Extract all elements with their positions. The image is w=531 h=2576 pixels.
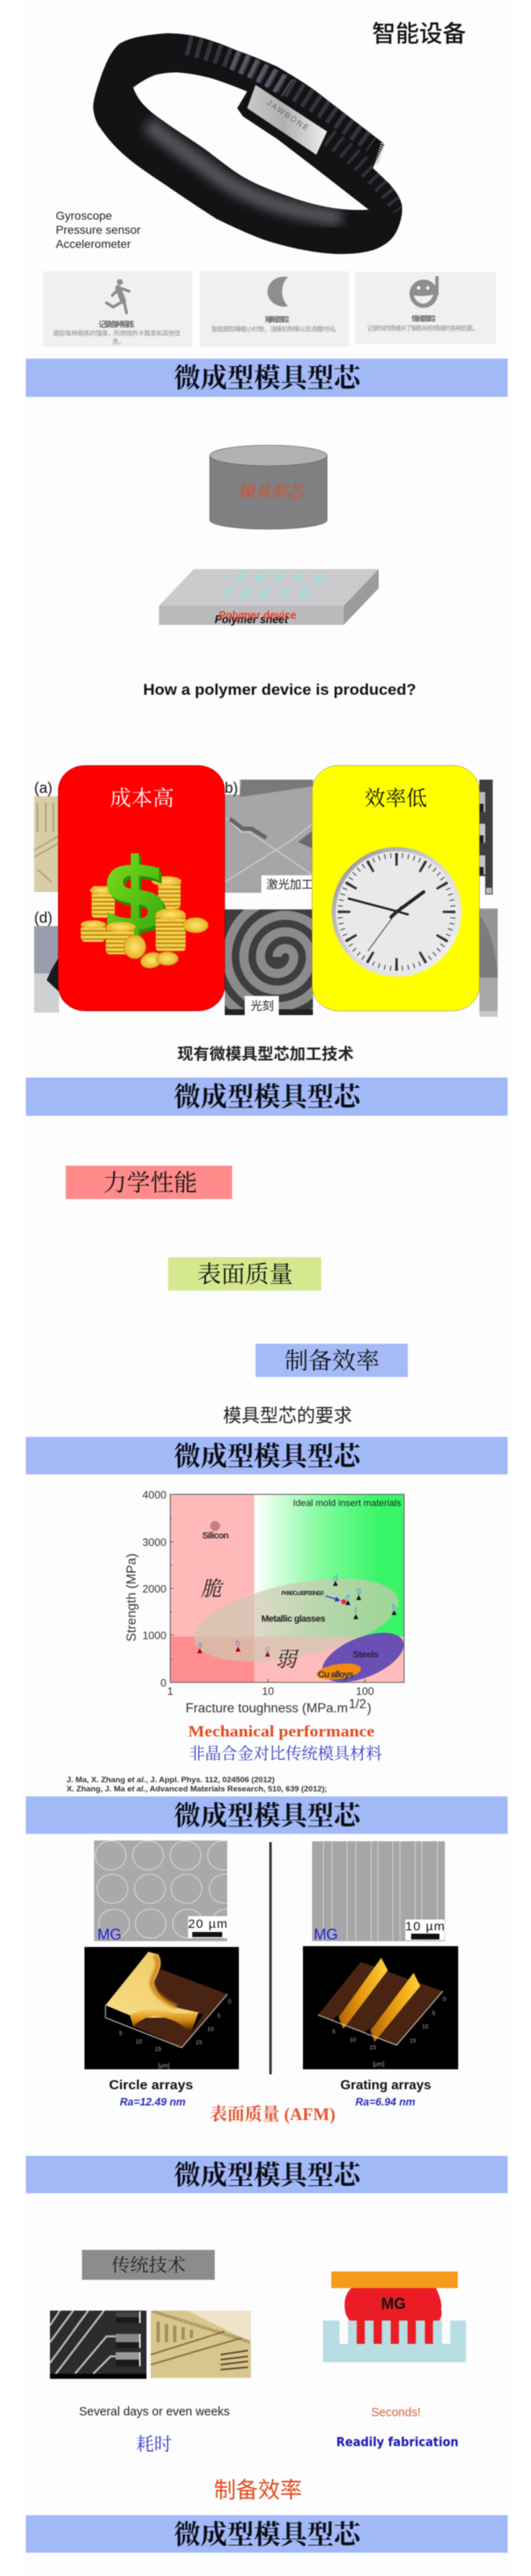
- diagram: polymer sheet: Polymer device: [219, 609, 296, 622]
- AFM axis labels: 15: [409, 2039, 416, 2044]
- mold: [323, 2321, 466, 2362]
- AFM axis labels: 5: [432, 2011, 435, 2017]
- heading band 5: [26, 2156, 508, 2193]
- label laser machining: 激光加工: [266, 878, 313, 891]
- alloy callout: [281, 1589, 346, 1604]
- label photolithography: [245, 996, 279, 1015]
- y-axis tick labels: 1000: [142, 1629, 166, 1642]
- panel: mood tracking card: 情绪跟踪: [411, 315, 436, 323]
- AFM axis labels: 5: [119, 2031, 122, 2037]
- heading band 1: [26, 359, 508, 397]
- data marker letters: d: [333, 1574, 338, 1583]
- weak label: 弱: [275, 1649, 299, 1672]
- silicon marker: [202, 1521, 229, 1541]
- icon: smiling face: [409, 276, 438, 308]
- copper alloys zone: [315, 1661, 362, 1682]
- x-axis tick labels: 1: [167, 1685, 173, 1697]
- image: SEM grating arrays: [312, 1841, 444, 1943]
- x-axis title closing bracket: ): [367, 1702, 371, 1716]
- data marker letters: a: [197, 1641, 202, 1650]
- heading band 3: [26, 1437, 508, 1474]
- polymer device features: [221, 573, 325, 597]
- AFM axis labels: 15: [155, 2047, 161, 2053]
- icon: dollar and gold coins: [81, 838, 208, 970]
- diagram: cylindrical mold insert: [210, 445, 327, 529]
- panel: existing micro-mold machining images: [34, 780, 498, 1023]
- divider: [270, 1842, 271, 2074]
- card: high cost: [58, 765, 225, 1011]
- metallic glasses zone: [187, 1563, 405, 1677]
- label d: (d): [34, 909, 52, 926]
- ideal region: [255, 1494, 404, 1637]
- AFM axis labels: 0: [443, 1997, 446, 2003]
- y-axis tick labels: 3000: [142, 1536, 166, 1548]
- panel: activity tracking card: 记录各种锻炼: [98, 320, 135, 329]
- icon: runner: [107, 279, 129, 313]
- caption: how a polymer device is produced: How a polymer device is produced?: [143, 681, 416, 698]
- image: SEM circle arrays: MG: [97, 1926, 122, 1943]
- press plate: [331, 2271, 458, 2288]
- data marker letters: f: [355, 1607, 357, 1616]
- x-axis tick labels: 100: [356, 1685, 374, 1697]
- heading band 1: 微成型模具型芯: [174, 363, 363, 393]
- y-axis title: Strength (MPa): [125, 1553, 139, 1642]
- box: traditional technique: [82, 2250, 215, 2280]
- panel: activity tracking card: [43, 271, 192, 347]
- sensor list: Accelerometer: [56, 237, 132, 250]
- alloy callout: Pd40Cu30P20Ni10: [281, 1589, 324, 1597]
- heading band 4: [26, 1796, 508, 1834]
- caption: existing machining techniques: 现有微模具型芯加工技术: [177, 1045, 354, 1063]
- panel: activity tracking card: 跟踪每种锻炼的强度，所燃烧的卡路里和其他信: [53, 329, 181, 337]
- data marker letters: b: [236, 1639, 241, 1648]
- weak region: [170, 1637, 404, 1682]
- panel: sleep tracking card: [200, 271, 349, 347]
- image b: [225, 780, 313, 893]
- sensor list: [56, 209, 141, 250]
- image: AFM circle array: [85, 1947, 239, 2069]
- sensor list: Gyroscope: [56, 209, 112, 222]
- silicon marker: Silicon: [202, 1531, 229, 1541]
- axes: [170, 1494, 404, 1682]
- panel: activity tracking card: 息。: [112, 337, 125, 345]
- AFM raised plateau: [106, 1952, 200, 2018]
- box: mechanical properties: 力学性能: [103, 1170, 197, 1196]
- data marker letters: [197, 1574, 396, 1654]
- label laser machining: [261, 875, 313, 894]
- AFM axis labels: [332, 1997, 446, 2068]
- heading band 2: [26, 1077, 508, 1116]
- image: SEM grating arrays: MG: [314, 1926, 338, 1943]
- brittle region: [170, 1494, 255, 1682]
- caption: fabrication efficiency: 制备效率: [214, 2478, 302, 2503]
- y-axis tick labels: 2000: [142, 1583, 166, 1595]
- panel: sleep tracking card: 智能跟踪睡眠小时数，浅睡和熟睡以及清醒时间。: [211, 324, 340, 333]
- data marker letters: h: [392, 1603, 396, 1612]
- image: SEM machined microstructure: [50, 2311, 146, 2379]
- brittle label: 脆: [201, 1578, 224, 1601]
- sensor list: Pressure sensor: [56, 223, 141, 236]
- AFM axis labels: [119, 1999, 231, 2069]
- caption: circle arrays: Circle arrays: [109, 2078, 193, 2093]
- icon: moon: [267, 276, 288, 306]
- roughness: circle arrays: Ra=12.49 nm: [120, 2095, 186, 2108]
- heading band 6: 微成型模具型芯: [174, 2519, 363, 2549]
- card: high cost: 成本高: [110, 786, 174, 810]
- chart: strength vs fracture toughness: [125, 1489, 410, 1716]
- diagram: MG thermoplastic forming: MG: [381, 2296, 406, 2313]
- icon: dollar and gold coins: $: [99, 838, 171, 954]
- y-axis tick labels: 0: [161, 1677, 166, 1689]
- caption: readily fabrication: Readily fabrication: [336, 2435, 459, 2450]
- heading band 3: 微成型模具型芯: [174, 1441, 363, 1471]
- card: low efficiency: 效率低: [365, 787, 427, 810]
- steels zone: [315, 1622, 410, 1692]
- references: X. Zhang, J. Ma et al., Advanced Materials Research, 510, 639 (2012);: [67, 1785, 327, 1794]
- box: traditional technique: 传统技术: [112, 2255, 186, 2276]
- caption: surface quality AFM: 表面质量 (AFM): [210, 2104, 335, 2124]
- panel: sleep tracking card: 睡眠跟踪: [265, 315, 290, 324]
- card: low efficiency: [312, 765, 479, 1011]
- heading: smart devices: 智能设备: [372, 21, 466, 47]
- image a: [34, 796, 59, 892]
- y-axis tick labels: 4000: [142, 1489, 166, 1501]
- copper alloys label: Cu alloys: [318, 1670, 354, 1680]
- references: J. Ma, X. Zhang et al., J. Appl. Phys. 112, 024506 (2012): [67, 1776, 275, 1785]
- AFM axis labels: 10: [136, 2039, 142, 2045]
- silver plate with logo: [247, 85, 327, 155]
- silver plate with logo: JAWBONE: [265, 98, 310, 133]
- box: fabrication efficiency: 制备效率: [285, 1348, 380, 1375]
- heading band 2: 微成型模具型芯: [174, 1082, 363, 1112]
- metallic glasses label: Metallic glasses: [261, 1614, 325, 1624]
- diagram: polymer sheet: [159, 569, 379, 626]
- data markers: [197, 1581, 396, 1657]
- data marker letters: c: [266, 1645, 270, 1654]
- red MG body: [345, 2288, 442, 2344]
- references: [67, 1776, 327, 1794]
- AFM axis labels: 0: [228, 1999, 231, 2005]
- image c: [479, 780, 493, 894]
- AFM axis labels: [µm]: [373, 2062, 385, 2068]
- label b: b): [225, 780, 238, 796]
- heading band 6: [26, 2515, 508, 2553]
- icon: wall clock: [331, 847, 461, 977]
- AFM axis labels: 15: [196, 2040, 202, 2046]
- label photolithography: 光刻: [251, 999, 274, 1013]
- steels label: Steels: [353, 1650, 379, 1660]
- scale bar: 10 µm: [405, 1920, 444, 1934]
- data marker letters: g: [356, 1587, 361, 1596]
- x-axis title exponent: 1/2: [349, 1697, 366, 1712]
- panel: mood tracking card: 记录你的情绪并了解影响你情绪的各种因素。: [367, 324, 479, 332]
- box: mechanical properties: [66, 1166, 232, 1199]
- image f: [479, 909, 498, 1017]
- image: black fitness wristband: [93, 33, 402, 254]
- x-axis title: Fracture toughness (MPa.m: [186, 1702, 348, 1716]
- heading band 5: 微成型模具型芯: [174, 2160, 363, 2190]
- y-axis tick labels: [142, 1489, 166, 1689]
- panel: mood tracking card: [355, 272, 496, 344]
- ideal materials label: Ideal mold insert materials: [293, 1499, 401, 1508]
- scale bar: [405, 1920, 444, 1940]
- diagram: polymer sheet: Polymer sheet: [215, 613, 288, 626]
- x-axis tick labels: [167, 1685, 374, 1697]
- box: fabrication efficiency: [256, 1344, 408, 1377]
- image: traditional machined mold photo: [151, 2311, 251, 2378]
- box: surface quality: 表面质量: [197, 1261, 293, 1288]
- AFM axis labels: [µm]: [158, 2063, 170, 2069]
- diagram: cylindrical mold insert: 模具型芯: [238, 483, 305, 502]
- heading band 4: 微成型模具型芯: [174, 1801, 363, 1830]
- caption: seconds: Seconds!: [371, 2406, 421, 2420]
- box: surface quality: [168, 1257, 321, 1290]
- scale bar: 20 µm: [188, 1917, 227, 1931]
- caption: requirements for mold inserts: 模具型芯的要求: [223, 1405, 352, 1426]
- caption: time consuming: 耗时: [136, 2435, 172, 2455]
- AFM axis labels: 10: [350, 2038, 356, 2043]
- image spiral: [224, 909, 314, 1016]
- roughness: grating arrays: Ra=6.94 nm: [355, 2095, 415, 2108]
- AFM axis labels: 5: [332, 2029, 335, 2035]
- diagram: MG thermoplastic forming: [323, 2271, 466, 2362]
- AFM axis labels: 15: [370, 2045, 376, 2051]
- image: AFM grating array: [303, 1946, 458, 2069]
- AFM floor: [133, 1969, 227, 2048]
- image d: [34, 926, 59, 1013]
- caption: grating arrays: Grating arrays: [340, 2078, 431, 2093]
- label a: (a): [34, 780, 52, 796]
- image: SEM circle arrays: [93, 1840, 228, 1942]
- AFM axis labels: 10: [207, 2027, 214, 2033]
- scale bar: [188, 1916, 227, 1938]
- caption: amorphous alloy comparison: 非晶合金对比传统模具材料: [189, 1745, 382, 1763]
- AFM axis labels: 10: [422, 2024, 429, 2030]
- x-axis tick labels: 10: [262, 1685, 274, 1697]
- AFM front slope: [130, 2009, 200, 2034]
- icon: dollar and gold coins: $: [102, 841, 173, 957]
- caption: several days or even weeks: Several days or even weeks: [79, 2405, 230, 2419]
- AFM axis labels: 5: [217, 2014, 221, 2019]
- caption: mechanical performance: Mechanical performance: [188, 1723, 375, 1741]
- data marker letters: e: [345, 1593, 350, 1602]
